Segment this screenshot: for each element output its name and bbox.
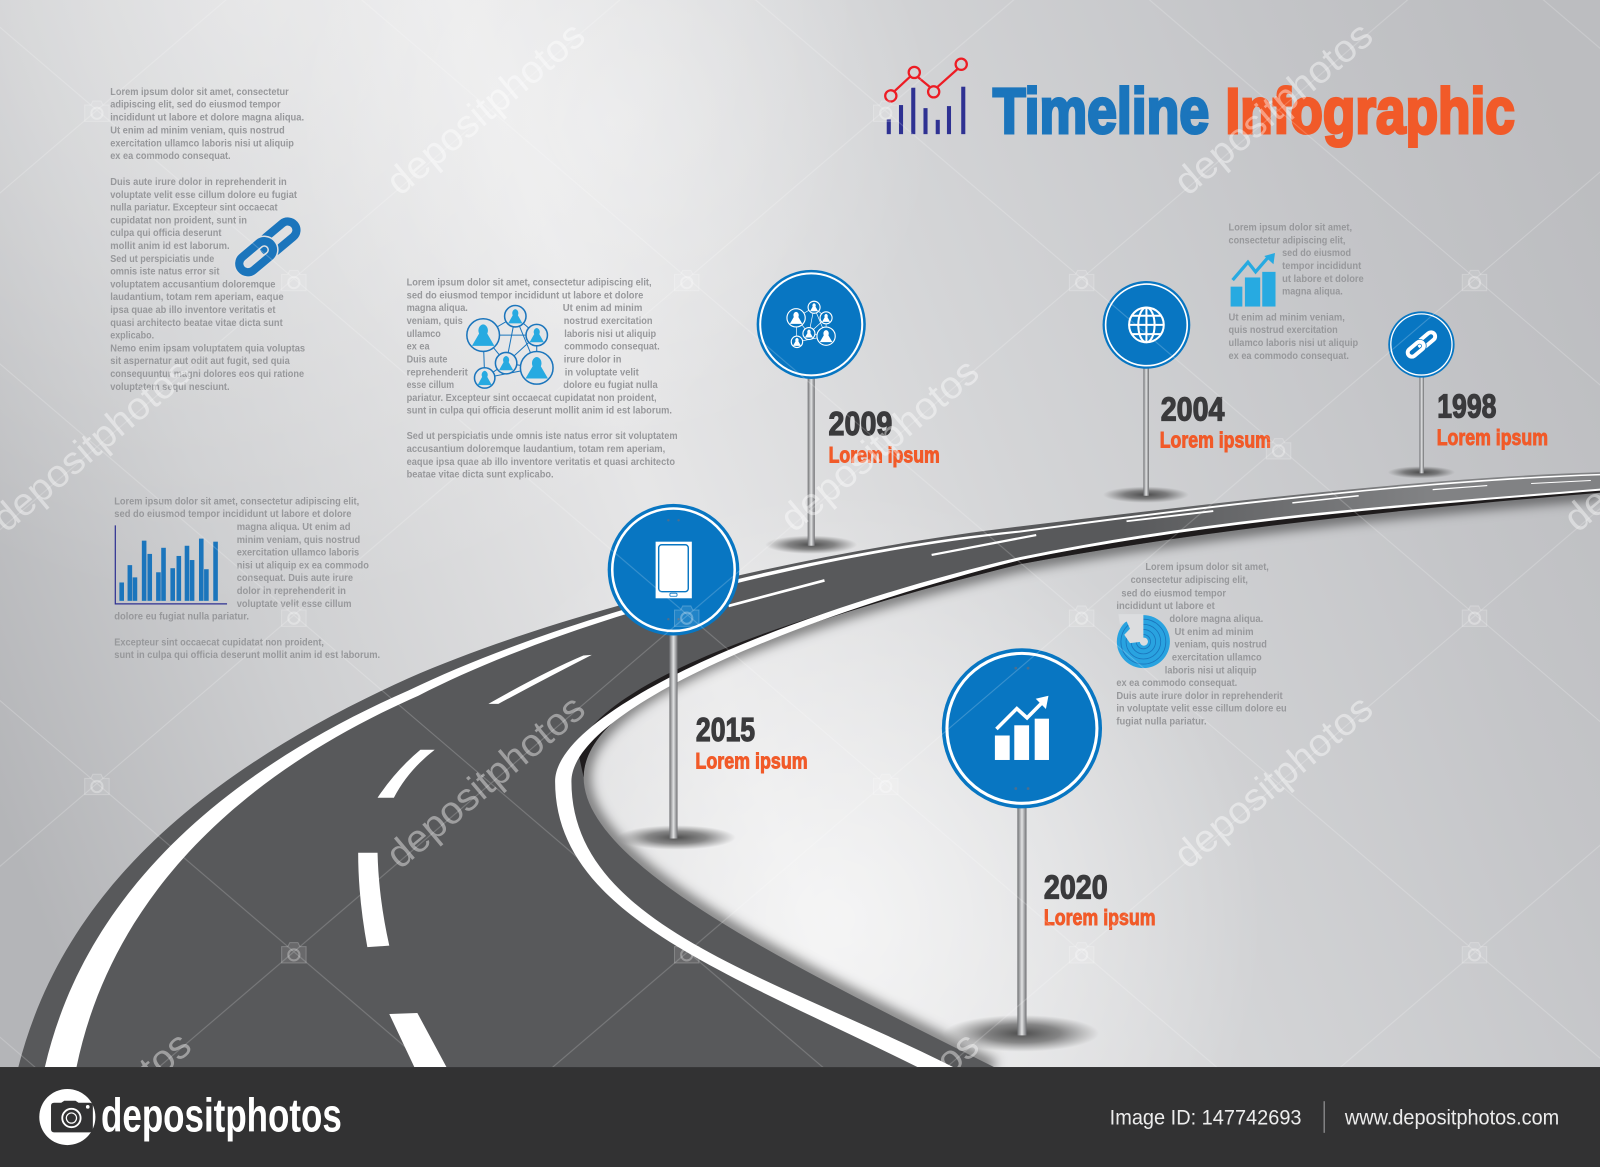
- icon: footer camera logo: [39, 1089, 95, 1145]
- footer bar: [0, 1067, 1600, 1167]
- text block: network: Sed ut perspiciatis unde omnis iste natus error sit voluptatem: [407, 431, 678, 442]
- text block: top left: sit aspernatur aut odit aut fugit, sed quia: [110, 356, 290, 367]
- year: 2015: [696, 712, 755, 749]
- text block: top left: culpa qui officia deserunt: [110, 228, 222, 239]
- text block: network: pariatur. Excepteur sint occaecat cupidatat non proident,: [407, 393, 657, 404]
- text block: pie: exercitation ullamco: [1172, 652, 1262, 663]
- label: Lorem ipsum: [1160, 427, 1271, 452]
- text block: top left: consequuntur magni dolores eos qui ratione: [110, 369, 304, 380]
- year: 2009: [829, 406, 892, 443]
- text block: bar chart: sed do eiusmod tempor incididunt ut labore et dolore: [114, 509, 352, 520]
- text block: top left: laudantium, totam rem aperiam, eaque: [110, 292, 284, 303]
- centre dashes: [358, 655, 592, 1067]
- icon: people network: [467, 306, 553, 388]
- milestone 2020: [942, 648, 1156, 1052]
- text block: pie: consectetur adipiscing elit,: [1131, 575, 1248, 586]
- text block: pie: [1116, 562, 1287, 727]
- text block: pie: Lorem ipsum dolor sit amet,: [1145, 562, 1269, 573]
- text block: pie: fugiat nulla pariatur.: [1116, 716, 1207, 727]
- year: 2020: [1044, 870, 1108, 907]
- text block: network: magna aliqua.: [407, 303, 468, 314]
- text block: growth: Ut enim ad minim veniam,: [1229, 312, 1345, 323]
- icon: growth chart: [995, 696, 1049, 760]
- milestone 2015: [608, 504, 808, 850]
- text block: pie: incididunt ut labore et: [1116, 601, 1215, 612]
- pole and shadow: [617, 632, 736, 850]
- watermark overlay: depositphotos: [378, 13, 593, 204]
- text block: top left: voluptatem sequi nesciunt.: [110, 382, 230, 393]
- text block: growth: tempor incididunt: [1282, 261, 1362, 272]
- sign: [757, 270, 866, 379]
- footer brand name: depositphotos: [101, 1089, 342, 1141]
- text block: growth: Lorem ipsum dolor sit amet,: [1229, 223, 1352, 234]
- winding road: [18, 472, 1600, 1067]
- text block: network: Duis aute: [407, 354, 448, 365]
- text block: bar chart: Excepteur sint occaecat cupidatat non proident,: [114, 637, 324, 648]
- text block: pie: laboris nisi ut aliquip: [1165, 665, 1257, 676]
- text block: network: [407, 278, 678, 481]
- text block: pie: Duis aute irure dolor in reprehenderit: [1116, 691, 1283, 702]
- text block: network: accusantium doloremque laudantium, totam rem aperiam,: [407, 444, 665, 455]
- text block: top left: incididunt ut labore et dolore magna aliqua.: [110, 112, 304, 123]
- watermark overlay: depositphotos: [1166, 687, 1381, 877]
- text block: top left: Nemo enim ipsam voluptatem quia voluptas: [110, 343, 305, 354]
- icon: growth chart: [1231, 253, 1276, 307]
- text block: growth: consectetur adipiscing elit,: [1229, 235, 1346, 246]
- label: Lorem ipsum: [695, 749, 808, 774]
- pole and shadow: [1388, 375, 1455, 478]
- bar chart: [115, 525, 227, 604]
- text block: network: in voluptate velit: [565, 367, 639, 378]
- text block: network: sed do eiusmod tempor incididunt ut labore et dolore: [407, 290, 644, 301]
- text block: bar chart: dolore eu fugiat nulla pariatur.: [114, 612, 249, 623]
- text block: top left: Duis aute irure dolor in reprehenderit in: [110, 177, 287, 188]
- footer website: www.depositphotos.com: [1344, 1106, 1559, 1130]
- sign: [1103, 281, 1190, 369]
- text block: bar chart: sunt in culpa qui officia deserunt mollit anim id est laborum.: [114, 650, 380, 661]
- text block: bar chart: minim veniam, quis nostrud: [237, 535, 360, 546]
- road surface: [18, 472, 1600, 1067]
- sign: [942, 648, 1102, 808]
- text block: bar chart: dolor in reprehenderit in: [237, 586, 346, 597]
- watermark overlay: depositphotos: [1166, 13, 1381, 204]
- text block: top left: voluptate velit esse cillum dolore eu fugiat: [110, 190, 297, 201]
- text block: pie: in voluptate velit esse cillum dolore eu: [1116, 704, 1287, 715]
- icon: title chart: [885, 59, 967, 134]
- icon: globe: [1129, 308, 1164, 342]
- label: Lorem ipsum: [1437, 425, 1548, 450]
- text block: growth: ut labore et dolore: [1282, 274, 1364, 285]
- pole and shadow: [944, 806, 1099, 1052]
- text block: pie: veniam, quis nostrud: [1174, 640, 1267, 651]
- text block: bar chart: Lorem ipsum dolor sit amet, consectetur adipiscing elit,: [114, 496, 359, 507]
- text block: network: Lorem ipsum dolor sit amet, consectetur adipiscing elit,: [407, 278, 652, 289]
- text block: top left: Sed ut perspiciatis unde: [110, 254, 215, 265]
- text block: bar chart: voluptate velit esse cillum: [237, 599, 352, 610]
- text block: top left: exercitation ullamco laboris nisi ut aliquip: [110, 138, 294, 149]
- text block: bar chart: [114, 496, 380, 661]
- text block: network: veniam, quis: [407, 316, 463, 327]
- pole and shadow: [1103, 367, 1189, 503]
- road inner shadow: [584, 493, 1600, 1067]
- footer image id: Image ID: 147742693: [1110, 1106, 1302, 1130]
- year: 1998: [1437, 389, 1496, 426]
- sign: [608, 504, 739, 636]
- icon: concentric pie: [1117, 614, 1170, 668]
- text block: network: irure dolor in: [564, 354, 621, 365]
- text block: growth: quis nostrud exercitation: [1229, 325, 1338, 336]
- text block: pie: ex ea commodo consequat.: [1116, 678, 1237, 689]
- milestone 2004: [1103, 281, 1271, 503]
- text block: network: Ut enim ad minim: [563, 303, 642, 314]
- watermark overlay: depositphotos: [772, 350, 987, 540]
- text block: top left: omnis iste natus error sit: [110, 267, 220, 278]
- text block: top left: Lorem ipsum dolor sit amet, consectetur: [110, 87, 289, 98]
- road black kerb: [578, 490, 1600, 777]
- icon: chain link: [1406, 331, 1437, 358]
- title: [993, 75, 1515, 147]
- text block: top left: quasi architecto beatae vitae dicta sunt: [110, 318, 283, 329]
- text block: network: ex ea: [407, 342, 430, 353]
- label: Lorem ipsum: [1044, 905, 1156, 930]
- text block: top left: explicabo.: [110, 331, 154, 342]
- milestone 2009: [757, 270, 940, 554]
- pole and shadow: [765, 377, 857, 554]
- text block: bar chart: exercitation ullamco laboris: [237, 548, 359, 559]
- year: 2004: [1161, 391, 1225, 428]
- text block: network: commodo consequat.: [564, 342, 660, 353]
- text block: network: nostrud exercitation: [564, 316, 653, 327]
- outer white edge line: [45, 474, 1600, 1067]
- milestone 1998: [1388, 311, 1548, 478]
- text block: pie: Ut enim ad minim: [1174, 627, 1254, 638]
- text block: network: ullamco: [407, 329, 441, 340]
- text block: network: beatae vitae dicta sunt explicabo.: [407, 470, 554, 481]
- text block: pie: sed do eiusmod tempor: [1121, 588, 1226, 599]
- text block: bar chart: nisi ut aliquip ex ea commodo: [237, 561, 369, 572]
- text block: network: sunt in culpa qui officia deserunt mollit anim id est laborum.: [407, 406, 672, 417]
- text block: pie: dolore magna aliqua.: [1169, 614, 1263, 625]
- text block: top left: voluptatem accusantium doloremque: [110, 279, 276, 290]
- text block: top left: [110, 87, 305, 393]
- text block: growth: ullamco laboris nisi ut aliquip: [1229, 338, 1358, 349]
- text block: top left: Ut enim ad minim veniam, quis nostrud: [110, 126, 285, 137]
- text block: growth: [1229, 223, 1364, 362]
- icon: tablet: [656, 542, 692, 598]
- text block: bar chart: magna aliqua. Ut enim ad: [237, 522, 351, 533]
- title: Timeline: [993, 75, 1209, 147]
- sign: [1388, 311, 1455, 378]
- text block: top left: ipsa quae ab illo inventore veritatis et: [110, 305, 276, 316]
- text block: growth: magna aliqua.: [1282, 287, 1343, 298]
- title: Infographic: [1226, 75, 1515, 147]
- text block: network: eaque ipsa quae ab illo inventore veritatis et quasi architecto: [407, 457, 675, 468]
- text block: network: dolore eu fugiat nulla: [563, 380, 658, 391]
- text block: top left: nulla pariatur. Excepteur sint occaecat: [110, 203, 278, 214]
- icon: people network: [787, 301, 835, 348]
- text block: network: reprehenderit: [407, 367, 468, 378]
- text block: growth: sed do eiusmod: [1282, 248, 1351, 259]
- inner white edge line: [555, 489, 1600, 1067]
- text block: network: esse cillum: [407, 380, 454, 391]
- text block: bar chart: consequat. Duis aute irure: [237, 573, 353, 584]
- icon: chain link: [236, 218, 300, 276]
- watermark overlay: depositphotos: [378, 687, 593, 877]
- text block: top left: cupidatat non proident, sunt in: [110, 215, 247, 226]
- text block: top left: mollit anim id est laborum.: [110, 241, 230, 252]
- text block: growth: ex ea commodo consequat.: [1229, 351, 1349, 362]
- label: Lorem ipsum: [829, 443, 940, 468]
- text block: top left: ex ea commodo consequat.: [110, 151, 231, 162]
- text block: top left: adipiscing elit, sed do eiusmod tempor: [110, 100, 281, 111]
- text block: network: laboris nisi ut aliquip: [564, 329, 656, 340]
